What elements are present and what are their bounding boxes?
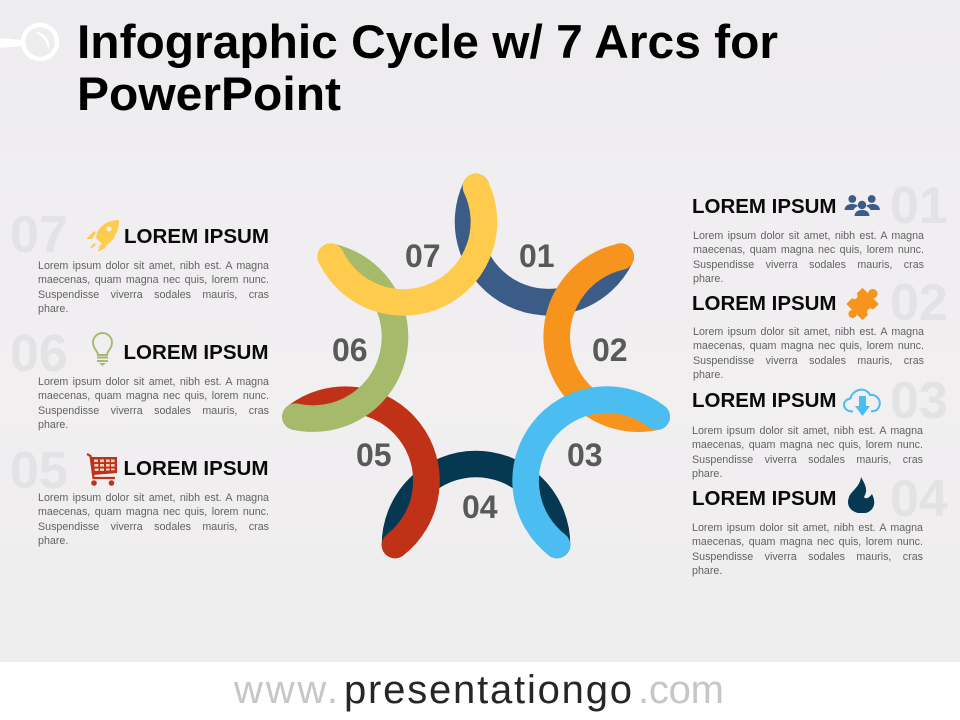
body text 01: maecenas, quam magna nec quis, lorem nunc. bbox=[693, 244, 924, 256]
panel: 02 bbox=[692, 274, 948, 381]
cycle diagram with 7 arcs bbox=[282, 174, 670, 558]
body text 06: Lorem ipsum dolor sit amet, nibh est. A magna bbox=[38, 376, 269, 388]
icon: shopping cart bbox=[87, 454, 117, 486]
ghost number 07: 07 bbox=[10, 206, 68, 264]
body text 05: maecenas, quam magna nec quis, lorem nunc. bbox=[38, 506, 269, 518]
arc 01 bbox=[468, 187, 621, 302]
arc number labels: 07 bbox=[405, 238, 441, 274]
ghost number 04: 04 bbox=[890, 470, 948, 528]
icon: rocket bbox=[86, 220, 119, 252]
title ring decoration bbox=[0, 22, 60, 62]
body text 04: phare. bbox=[692, 565, 722, 577]
heading 04: LOREM IPSUM bbox=[692, 488, 836, 510]
arc 06 bbox=[296, 257, 395, 419]
panel: 06 bbox=[10, 325, 269, 431]
title: Infographic Cycle w/ 7 Arcs for bbox=[77, 15, 778, 68]
body text 03: maecenas, quam magna nec quis, lorem nunc. bbox=[692, 439, 923, 451]
title: PowerPoint bbox=[77, 67, 341, 120]
arc number labels: 04 bbox=[462, 489, 498, 525]
icon: flame bbox=[848, 477, 874, 513]
icon: puzzle piece bbox=[839, 280, 887, 328]
arc 05 bbox=[296, 400, 426, 545]
panel: 07 bbox=[10, 206, 269, 315]
body text 04: maecenas, quam magna nec quis, lorem nunc. bbox=[692, 536, 923, 548]
body text 03: phare. bbox=[692, 468, 722, 480]
ghost number 05: 05 bbox=[10, 442, 68, 500]
ghost number 02: 02 bbox=[890, 274, 948, 332]
arc 04 bbox=[395, 464, 557, 545]
body text 07: maecenas, quam magna nec quis, lorem nunc. bbox=[38, 274, 269, 286]
arc number labels: 01 bbox=[519, 238, 555, 274]
heading 05: LOREM IPSUM bbox=[124, 458, 268, 480]
icon: people bbox=[844, 195, 880, 216]
panel: 05 bbox=[10, 442, 269, 547]
footer url bbox=[233, 668, 724, 712]
heading 07: LOREM IPSUM bbox=[124, 226, 269, 248]
title bbox=[77, 15, 778, 120]
body text 01: Suspendisse viverra sodales mauris, cras bbox=[693, 259, 924, 271]
footer url: www. bbox=[233, 668, 338, 712]
body text 07 bbox=[38, 260, 269, 315]
panel: 03 bbox=[692, 372, 948, 480]
body text 01 bbox=[693, 230, 924, 285]
heading 03: LOREM IPSUM bbox=[692, 390, 836, 412]
body text 05: phare. bbox=[38, 535, 68, 547]
arc 02 bbox=[557, 257, 657, 419]
arc 03 bbox=[526, 400, 657, 545]
icon: light bulb bbox=[93, 333, 112, 366]
body text 04: Lorem ipsum dolor sit amet, nibh est. A magna bbox=[692, 522, 923, 534]
body text 07: Lorem ipsum dolor sit amet, nibh est. A magna bbox=[38, 260, 269, 272]
arc 07 bbox=[331, 187, 484, 302]
ghost number 06: 06 bbox=[10, 325, 68, 383]
body text 01: phare. bbox=[693, 273, 723, 285]
body text 06 bbox=[38, 376, 269, 431]
body text 02 bbox=[693, 326, 924, 381]
arc number labels: 03 bbox=[567, 437, 603, 473]
body text 06: Suspendisse viverra sodales mauris, cras bbox=[38, 405, 269, 417]
arc number labels: 02 bbox=[592, 332, 628, 368]
body text 03 bbox=[692, 425, 923, 480]
heading 02: LOREM IPSUM bbox=[692, 293, 836, 315]
body text 04: Suspendisse viverra sodales mauris, cras bbox=[692, 551, 923, 563]
body text 02: phare. bbox=[693, 369, 723, 381]
arc number labels bbox=[332, 238, 628, 525]
body text 02: Lorem ipsum dolor sit amet, nibh est. A magna bbox=[693, 326, 924, 338]
body text 03: Lorem ipsum dolor sit amet, nibh est. A magna bbox=[692, 425, 923, 437]
body text 03: Suspendisse viverra sodales mauris, cras bbox=[692, 454, 923, 466]
panel: 04 bbox=[692, 470, 948, 577]
ghost number 01: 01 bbox=[890, 177, 948, 235]
body text 05 bbox=[38, 492, 269, 547]
body text 05: Lorem ipsum dolor sit amet, nibh est. A magna bbox=[38, 492, 269, 504]
icon: cloud download bbox=[844, 390, 880, 416]
body text 06: phare. bbox=[38, 419, 68, 431]
body text 04 bbox=[692, 522, 923, 577]
panel: 01 bbox=[692, 177, 948, 285]
body text 07: Suspendisse viverra sodales mauris, cras bbox=[38, 289, 269, 301]
body text 01: Lorem ipsum dolor sit amet, nibh est. A magna bbox=[693, 230, 924, 242]
arc number labels: 05 bbox=[356, 437, 392, 473]
body text 02: maecenas, quam magna nec quis, lorem nunc. bbox=[693, 340, 924, 352]
ghost number 03: 03 bbox=[890, 372, 948, 430]
body text 06: maecenas, quam magna nec quis, lorem nunc. bbox=[38, 390, 269, 402]
arc number labels: 06 bbox=[332, 332, 368, 368]
heading 01: LOREM IPSUM bbox=[692, 196, 836, 218]
footer url: presentationgo bbox=[344, 668, 632, 712]
body text 02: Suspendisse viverra sodales mauris, cras bbox=[693, 355, 924, 367]
heading 06: LOREM IPSUM bbox=[124, 342, 268, 364]
body text 07: phare. bbox=[38, 303, 68, 315]
footer url: .com bbox=[638, 668, 724, 712]
body text 05: Suspendisse viverra sodales mauris, cras bbox=[38, 521, 269, 533]
footer band bbox=[0, 662, 960, 720]
